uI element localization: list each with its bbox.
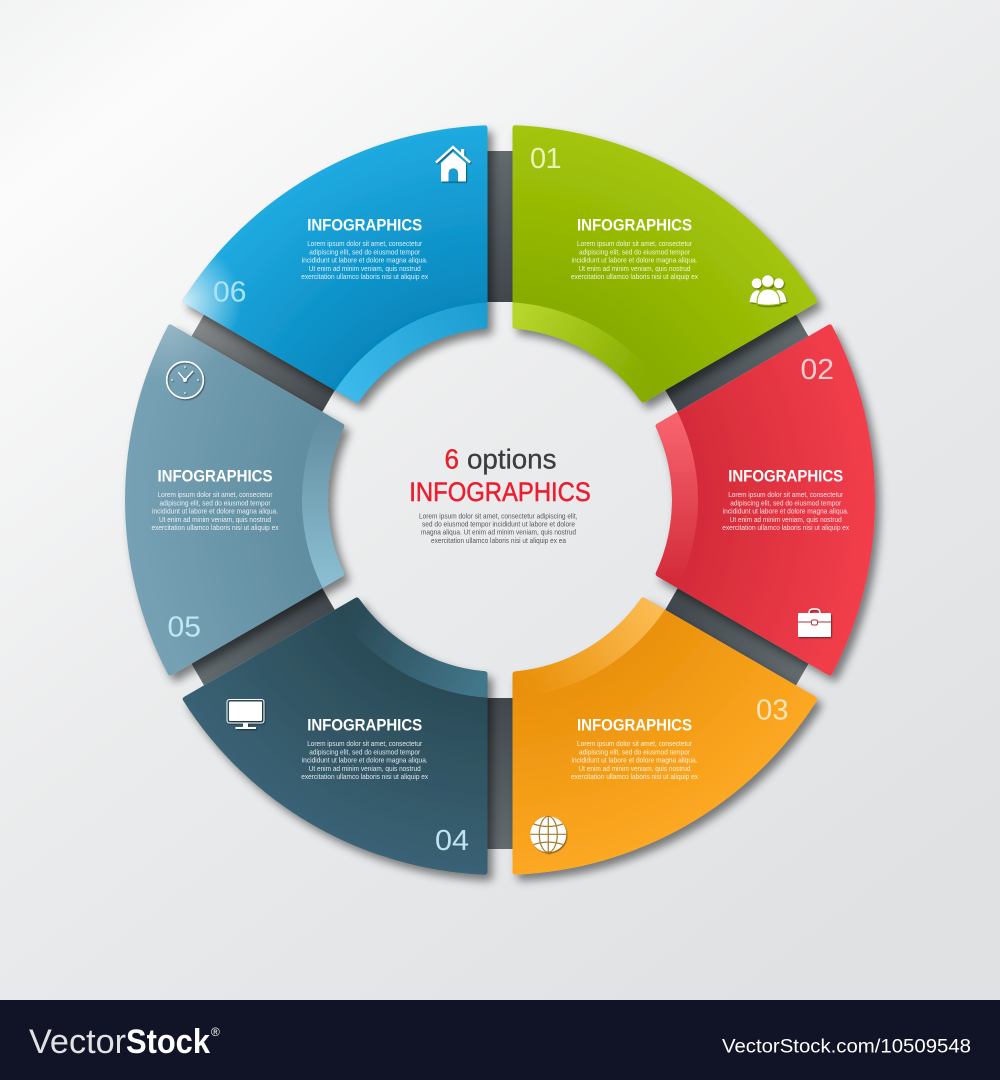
centre body text	[419, 512, 578, 545]
body text 01: incididunt ut labore et dolore magna aliqua.	[572, 256, 698, 264]
body text 06: exercitation ullamco laboris nisi ut aliquip ex	[301, 272, 428, 281]
body text 01: adipiscing elit, sed do eiusmod tempor	[579, 247, 690, 256]
panel: segment 06 blue	[182, 125, 499, 413]
footer logo: Stock	[126, 1023, 210, 1061]
heading 03: INFOGRAPHICS	[577, 716, 692, 734]
body text 01: Lorem ipsum dolor sit amet, consectetur	[577, 239, 692, 248]
segment shape 03	[512, 598, 827, 886]
panel: segment 03 orange	[512, 598, 827, 886]
icon: house	[436, 147, 470, 182]
panel: segment 01 green	[511, 125, 826, 413]
body text 04: incididunt ut labore et dolore magna aliqua.	[302, 756, 428, 764]
body text 04: Lorem ipsum dolor sit amet, consectetur	[307, 739, 423, 748]
segment shape 06	[182, 125, 499, 413]
body text 03: exercitation ullamco laboris nisi ut aliquip ex	[571, 772, 698, 781]
body text 04: exercitation ullamco laboris nisi ut aliquip ex	[301, 772, 428, 781]
title word options: options	[467, 443, 556, 474]
icon: clock	[167, 362, 203, 398]
centre body text: exercitation ullamco laboris nisi ut aliquip ex ea	[431, 536, 567, 545]
heading 01: INFOGRAPHICS	[577, 216, 692, 234]
centre body text: sed do eiusmod tempor incididunt ut labore et dolore	[422, 520, 575, 528]
body text 02	[722, 490, 849, 532]
centre title and text	[409, 443, 591, 545]
body text 04: adipiscing elit, sed do eiusmod tempor	[309, 747, 421, 756]
heading 05: INFOGRAPHICS	[158, 467, 272, 485]
body text 03: incididunt ut labore et dolore magna aliqua.	[572, 756, 698, 764]
heading 02: INFOGRAPHICS	[728, 467, 843, 485]
body text 05: incididunt ut labore et dolore magna aliqua.	[152, 506, 278, 516]
segment shape 04	[182, 598, 498, 886]
body text 02: Ut enim ad minim veniam, quis nostrud	[730, 515, 842, 524]
footer url: VectorStock.com/10509548	[722, 1036, 971, 1058]
panel: segment 05 slate blue	[124, 324, 354, 686]
body text 02: Lorem ipsum dolor sit amet, consectetur	[728, 490, 844, 499]
connector bars	[192, 151, 808, 849]
segment shape 02	[656, 324, 886, 686]
body text 05: Lorem ipsum dolor sit amet, consectetur	[158, 490, 273, 499]
title INFOGRAPHICS: INFOGRAPHICS	[409, 477, 591, 507]
icon: monitor	[227, 700, 264, 729]
footer logo: ®	[211, 1025, 220, 1039]
body text 06: adipiscing elit, sed do eiusmod tempor	[309, 247, 421, 256]
heading 06: INFOGRAPHICS	[307, 216, 422, 234]
number 01: 01	[530, 143, 562, 175]
footer bar	[0, 1000, 1000, 1080]
body text 03: Ut enim ad minim veniam, quis nostrud	[578, 764, 690, 773]
body text 02: incididunt ut labore et dolore magna aliqua.	[723, 506, 849, 516]
icon: people	[750, 275, 786, 305]
segment shape 05	[124, 324, 354, 686]
body text 06: incididunt ut labore et dolore magna aliqua.	[302, 256, 428, 264]
number 03: 03	[756, 694, 788, 726]
segment shape 01	[511, 125, 826, 413]
body text 06: Lorem ipsum dolor sit amet, consectetur	[307, 239, 423, 248]
panel: segment 02 red	[656, 324, 886, 686]
body text 03: adipiscing elit, sed do eiusmod tempor	[579, 747, 690, 756]
body text 01: Ut enim ad minim veniam, quis nostrud	[578, 264, 690, 273]
number 02: 02	[800, 354, 834, 386]
body text 05	[152, 490, 279, 532]
body text 03	[571, 739, 698, 781]
body text 04	[301, 739, 428, 781]
body text 06: Ut enim ad minim veniam, quis nostrud	[309, 264, 421, 273]
centre body text: magna aliqua. Ut enim ad minim veniam, quis nostrud	[421, 528, 576, 537]
number 05: 05	[168, 612, 201, 644]
icon: briefcase	[798, 609, 831, 637]
centre body text: Lorem ipsum dolor sit amet, consectetur adipiscing elit,	[419, 512, 578, 520]
heading 04: INFOGRAPHICS	[307, 716, 422, 734]
footer logo	[29, 1023, 220, 1061]
title number 6: 6	[444, 443, 459, 474]
number 04: 04	[435, 825, 469, 857]
body text 04: Ut enim ad minim veniam, quis nostrud	[309, 764, 421, 773]
body text 05: Ut enim ad minim veniam, quis nostrud	[159, 515, 271, 524]
body text 01	[571, 239, 698, 281]
body text 01: exercitation ullamco laboris nisi ut aliquip ex	[571, 272, 698, 281]
body text 02: exercitation ullamco laboris nisi ut aliquip ex	[722, 523, 849, 532]
body text 06	[301, 239, 428, 281]
footer logo: Vector	[29, 1023, 126, 1061]
body text 05: exercitation ullamco laboris nisi ut aliquip ex	[152, 523, 279, 532]
icon: globe	[530, 816, 566, 852]
panel: segment 04 dark teal	[182, 598, 498, 886]
number 06: 06	[213, 276, 246, 308]
body text 03: Lorem ipsum dolor sit amet, consectetur	[577, 739, 692, 748]
body text 02: adipiscing elit, sed do eiusmod tempor	[730, 498, 842, 507]
body text 05: adipiscing elit, sed do eiusmod tempor	[160, 498, 271, 507]
